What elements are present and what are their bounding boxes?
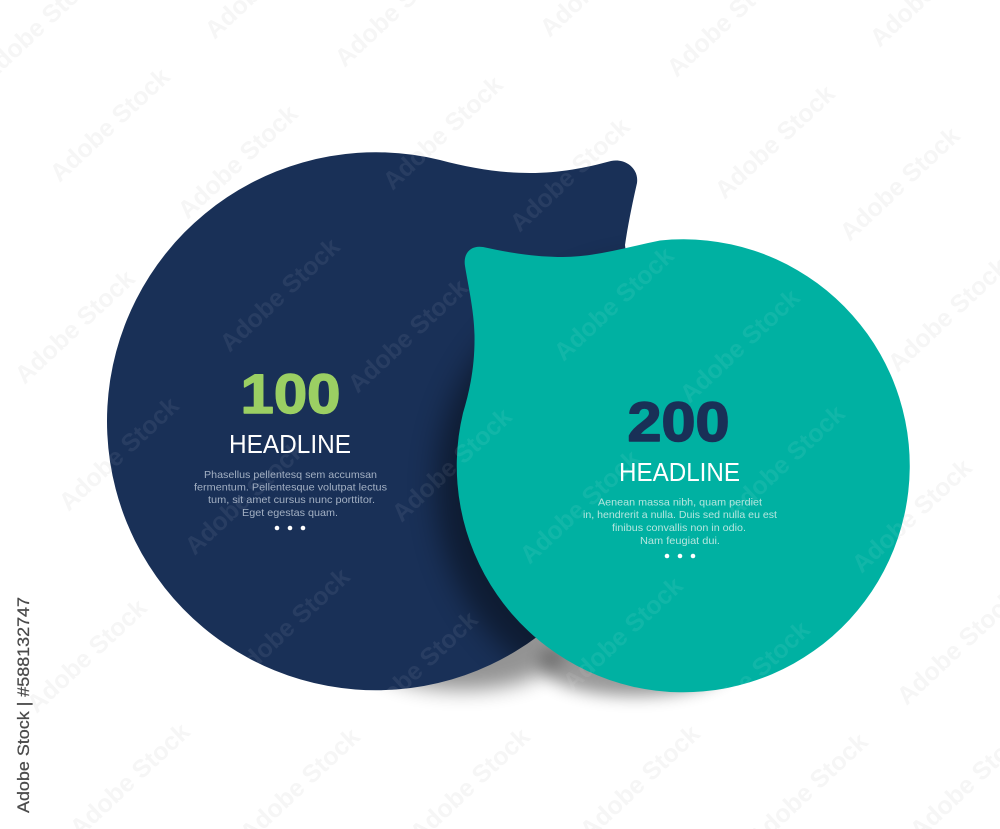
body text right: finibus convallis non in odio. bbox=[612, 522, 746, 534]
watermarks over the circles: Adobe Stock bbox=[847, 454, 977, 578]
right content block bbox=[583, 390, 777, 558]
background watermarks: Adobe Stock bbox=[10, 265, 140, 389]
vertical stock id label: Adobe Stock | #588132747 bbox=[15, 597, 33, 813]
background watermarks: Adobe Stock bbox=[378, 71, 508, 195]
watermarks over the circles: Adobe Stock bbox=[10, 265, 140, 389]
body text left: fermentum. Pellentesque volutpat lectus bbox=[194, 482, 387, 494]
watermarks over the circles: Adobe Stock bbox=[387, 403, 517, 527]
shadow cast by teal circle on navy bbox=[426, 345, 536, 659]
watermarks over the circles: Adobe Stock bbox=[675, 284, 805, 408]
watermarks over the circles: Adobe Stock bbox=[720, 400, 850, 524]
number 100: 100 bbox=[240, 362, 340, 425]
watermarks over the circles: Adobe Stock bbox=[378, 71, 508, 195]
headline right: HEADLINE bbox=[619, 459, 740, 487]
body text left bbox=[194, 469, 387, 519]
dots left bbox=[275, 526, 305, 530]
watermarks over the circles: Adobe Stock bbox=[515, 445, 645, 569]
watermarks over the circles: Adobe Stock bbox=[353, 606, 483, 730]
number 200: 200 bbox=[628, 390, 730, 453]
watermarks over the circles bbox=[10, 71, 977, 740]
panel: navy speech circle bbox=[107, 152, 645, 690]
background watermarks: Adobe Stock bbox=[173, 100, 303, 224]
body text left: tum, sit amet cursus nunc porttitor. bbox=[208, 494, 375, 506]
panel: teal speech circle bbox=[457, 239, 910, 692]
watermarks over the circles: Adobe Stock bbox=[505, 113, 635, 237]
dots right bbox=[665, 554, 695, 558]
watermarks over the circles: Adobe Stock bbox=[54, 392, 184, 516]
watermarks over the circles: Adobe Stock bbox=[225, 563, 355, 687]
watermarks over the circles: Adobe Stock bbox=[173, 100, 303, 224]
background watermarks: Adobe Stock bbox=[54, 392, 184, 516]
background watermarks: Adobe Stock bbox=[45, 63, 175, 187]
headline left: HEADLINE bbox=[229, 431, 351, 459]
watermarks over the circles: Adobe Stock bbox=[549, 242, 679, 366]
body text right: Aenean massa nibh, quam perdiet bbox=[598, 496, 762, 508]
body text right bbox=[583, 496, 777, 547]
background watermarks: Adobe Stock bbox=[847, 454, 977, 578]
watermarks over the circles: Adobe Stock bbox=[558, 572, 688, 696]
body text left: Eget egestas quam. bbox=[242, 507, 338, 519]
watermarks over the circles: Adobe Stock bbox=[343, 274, 473, 398]
watermarks over the circles: Adobe Stock bbox=[180, 436, 310, 560]
background watermarks: Adobe Stock bbox=[710, 80, 840, 204]
background watermarks: Adobe Stock bbox=[835, 122, 965, 246]
drop shadow: teal circle bbox=[540, 632, 730, 696]
background watermarks: Adobe Stock bbox=[22, 594, 152, 718]
drop shadow: navy circle bbox=[360, 602, 564, 690]
body text right: in, hendrerit a nulla. Duis sed nulla eu est bbox=[583, 509, 777, 521]
body text right: Nam feugiat dui. bbox=[640, 535, 720, 547]
watermarks over the circles: Adobe Stock bbox=[685, 616, 815, 740]
background watermarks: Adobe Stock bbox=[505, 113, 635, 237]
left content block bbox=[194, 362, 387, 530]
body text left: Phasellus pellentesq sem accumsan bbox=[204, 469, 377, 481]
watermarks over the circles: Adobe Stock bbox=[215, 233, 345, 357]
